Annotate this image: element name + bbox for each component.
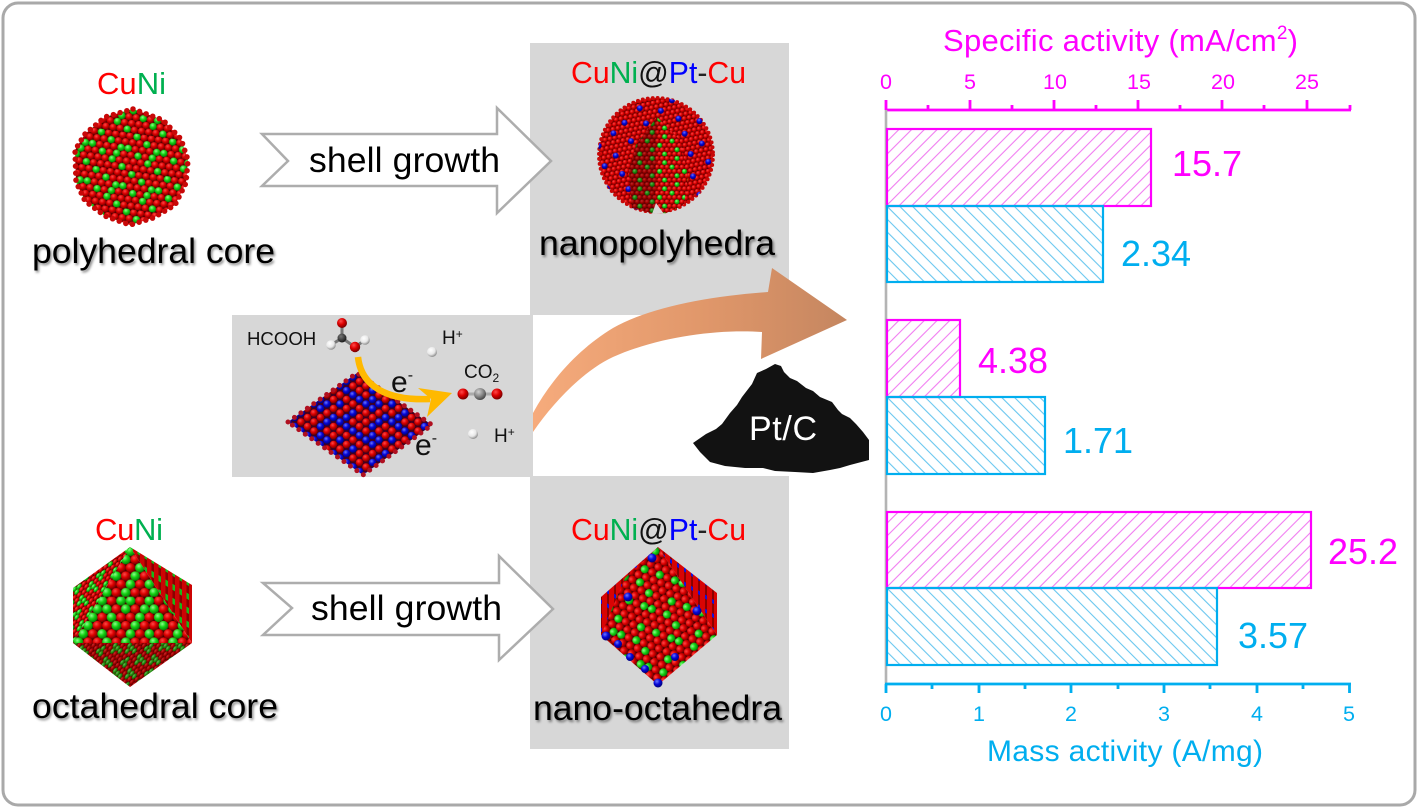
axis: specific activity ticks: 5 xyxy=(964,70,976,94)
value: 4.38: 4.38 xyxy=(978,340,1048,381)
axis: specific activity ticks xyxy=(880,70,1351,110)
bar: specific activity 15.7 xyxy=(887,129,1151,206)
label: CO2: CO xyxy=(464,362,492,383)
label: electron lower: e xyxy=(415,429,432,462)
label: electron upper: - xyxy=(408,367,413,384)
label: electron lower: - xyxy=(432,430,437,447)
bar: specific activity 4.38 xyxy=(887,320,960,397)
title: specific activity axis: ) xyxy=(1288,23,1298,58)
panel: nanopolyhedra background xyxy=(530,43,789,315)
panel: formic acid oxidation scheme xyxy=(247,318,515,475)
axis: category line xyxy=(885,110,887,684)
icon: octahedral CuNi core particle xyxy=(73,547,192,687)
axis: mass activity ticks: 3 xyxy=(1158,702,1170,726)
icon: polyhedral CuNi core particle xyxy=(75,109,188,225)
axis: mass activity ticks: 4 xyxy=(1251,702,1263,726)
axis: specific activity ticks: 20 xyxy=(1211,70,1235,94)
value: 3.57: 3.57 xyxy=(1238,615,1308,656)
icon: Pt/C powder pile xyxy=(693,364,869,473)
icon: nanopolyhedron cutaway particle xyxy=(598,97,714,214)
axis: specific activity ticks: 10 xyxy=(1043,70,1067,94)
arrow: shell growth bottom xyxy=(263,556,553,660)
bar: mass activity 3.57 xyxy=(887,588,1217,665)
label: Pt/C: Pt/C xyxy=(749,410,817,448)
label: CuNi@Pt-Cu bottom: CuNi@Pt-Cu xyxy=(571,514,746,547)
icon: formic acid molecule xyxy=(326,318,370,352)
icon: H atom upper xyxy=(427,347,437,357)
value: 1.71: 1.71 xyxy=(1063,420,1133,461)
title: mass activity axis: Mass activity (A/mg) xyxy=(987,735,1263,768)
bar: mass activity 1.71 xyxy=(887,397,1045,474)
value: 15.7: 15.7 xyxy=(1172,143,1242,184)
chart: specific and mass activity bars xyxy=(880,23,1398,768)
icon: CO2 molecule xyxy=(458,388,502,400)
icon: H atom lower xyxy=(468,429,478,439)
label: polyhedral core: polyhedral core xyxy=(32,231,275,271)
axis: mass activity ticks: 2 xyxy=(1065,702,1077,726)
label: CuNi bottom: CuNi xyxy=(95,512,163,547)
axis: mass activity ticks: 1 xyxy=(973,702,985,726)
bar: mass activity 2.34 xyxy=(887,206,1103,282)
panel: reaction scheme background xyxy=(232,315,533,477)
label: H+ upper: + xyxy=(456,327,463,341)
label: octahedral core: octahedral core xyxy=(32,686,278,726)
label: electron upper: e xyxy=(391,366,408,399)
value: 2.34: 2.34 xyxy=(1121,233,1191,274)
label: H+ lower: H xyxy=(494,426,508,447)
arrow: curved peach arrow to chart xyxy=(533,268,847,432)
bar: specific activity 25.2 xyxy=(887,512,1311,588)
label: shell growth bottom: shell growth xyxy=(311,588,502,628)
axis: specific activity ticks: 0 xyxy=(880,70,892,94)
label: CO2: 2 xyxy=(492,371,500,385)
axis: specific activity ticks: 25 xyxy=(1295,70,1319,94)
label: CuNi top: CuNi xyxy=(97,66,166,101)
axis: specific activity ticks: 15 xyxy=(1127,70,1151,94)
label: shell growth top: shell growth xyxy=(309,140,500,180)
label: nanopolyhedra: nanopolyhedra xyxy=(539,223,775,263)
title: specific activity axis: 2 xyxy=(1277,23,1287,44)
label: CuNi@Pt-Cu top: CuNi@Pt-Cu xyxy=(571,57,746,90)
title: specific activity axis: Specific activity (mA/cm xyxy=(943,23,1277,58)
panel: nano-octahedra background xyxy=(530,476,789,749)
label: H+ upper: H xyxy=(442,328,456,349)
label: H+ lower: + xyxy=(508,425,515,439)
axis: mass activity ticks: 5 xyxy=(1343,702,1355,726)
axis: mass activity ticks xyxy=(880,684,1355,726)
icon: nano-octahedron particle xyxy=(601,547,717,688)
arrow: shell growth top xyxy=(262,108,551,213)
axis: mass activity ticks: 0 xyxy=(880,702,892,726)
label: HCOOH: HCOOH xyxy=(247,328,316,349)
icon: Pt-Cu atomic slab xyxy=(288,373,432,475)
arrow: electron transfer xyxy=(358,357,452,417)
label: nano-octahedra: nano-octahedra xyxy=(533,688,782,728)
value: 25.2: 25.2 xyxy=(1328,531,1398,572)
